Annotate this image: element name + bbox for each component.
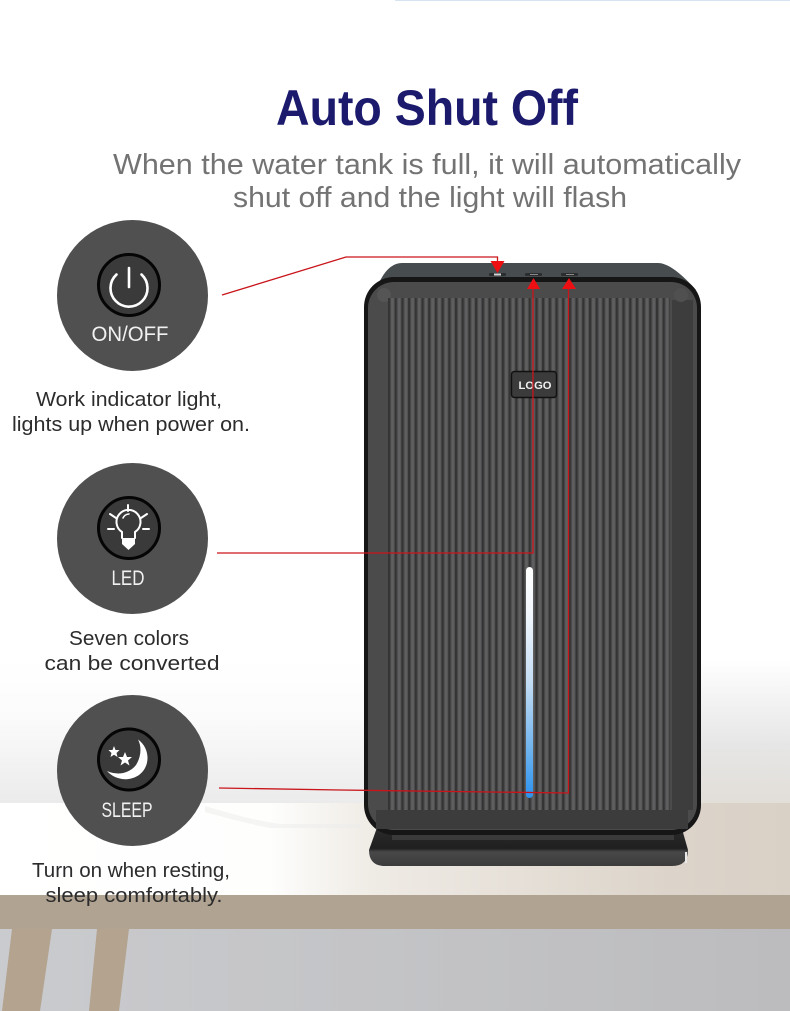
feature: LED: LED	[112, 567, 144, 590]
product base	[369, 822, 688, 866]
subtitle: shut off and the light will flash	[233, 182, 627, 214]
subtitle	[113, 149, 742, 214]
top edge line	[395, 0, 790, 1]
product body	[364, 277, 701, 835]
logo badge	[512, 372, 556, 398]
icon: power	[98, 254, 160, 316]
description: ON/OFF: Work indicator light,	[36, 389, 222, 411]
description: LED	[44, 628, 220, 675]
product top cap	[376, 263, 696, 290]
product: dehumidifier	[364, 263, 701, 866]
description: SLEEP: Turn on when resting,	[32, 860, 230, 882]
feature: ON/OFF	[57, 220, 208, 371]
icon: moon and stars	[98, 729, 160, 790]
feature: LED	[57, 463, 208, 614]
feature: SLEEP	[57, 695, 208, 846]
description: LED: can be converted	[44, 653, 220, 675]
water level window	[526, 567, 533, 798]
top buttons	[489, 273, 578, 276]
feature: ON/OFF: ON/OFF	[92, 323, 168, 346]
subtitle: When the water tank is full, it will automatically	[113, 149, 742, 181]
red callout lines	[217, 257, 568, 793]
title: Auto Shut Off	[276, 80, 578, 136]
logo badge: LOGO	[518, 380, 552, 392]
feature: SLEEP: SLEEP	[102, 799, 152, 822]
description: ON/OFF	[12, 389, 250, 436]
icon: light bulb	[98, 498, 160, 558]
description: SLEEP	[32, 860, 230, 907]
description: LED: Seven colors	[69, 628, 189, 650]
red arrowheads	[490, 261, 576, 289]
description: SLEEP: sleep comfortably.	[46, 885, 222, 907]
ventilation ribs	[388, 298, 670, 810]
description: ON/OFF: lights up when power on.	[12, 414, 250, 436]
